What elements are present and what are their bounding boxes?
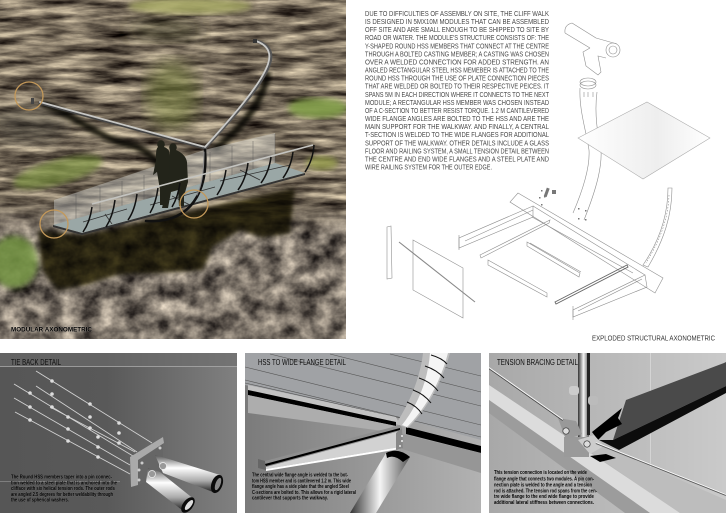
text block: structure description: THROUGH A BOLTED CASTING MEMBER; A CASTING WAS CHOSEN (365, 51, 549, 58)
steel angle sections (480, 220, 628, 304)
photo caption: MODULAR AXONOMETRIC (11, 326, 92, 334)
detail note: rod is attached. The tension rod spans from the cen- (494, 488, 597, 494)
railing tension rod (399, 242, 475, 302)
tension rods (489, 368, 726, 495)
bridge cast shadow (38, 72, 295, 290)
text block: structure description: SPANS 5M IN EACH DIRECTION WHERE IT CONNECTS TO THE NEXT (365, 92, 550, 99)
bolted connection (539, 188, 586, 220)
text block: structure description: Y-SHAPED ROUND HSS MEMBERS THAT CONNECT AT THE CENTRE (365, 43, 549, 50)
text block: structure description: ROUND HSS THROUGH THE USE OF PLATE CONNECTION PIECES (365, 76, 549, 83)
panel background (0, 353, 237, 513)
wide flange diagonal bands (489, 385, 726, 513)
text block: structure description: ROAD OR WATER. THE MODULE'S STRUCTURE CONSISTS OF: THE (365, 35, 549, 42)
glass railing panel (413, 240, 463, 318)
text block: structure description: ANGLED RECTANGULAR STEEL HSS MEMEBER IS ATTACHED TO THE (365, 68, 549, 75)
panel background (489, 353, 726, 513)
panel background (245, 385, 481, 513)
lower round HSS (350, 451, 410, 513)
text block: structure description: THAT ARE WELDED OR BOLTED TO THEIR RESPECTIVE PEICES. IT (365, 84, 550, 91)
detail note: the use of spherical washers. (11, 498, 69, 504)
cantilever wide flange angle (258, 425, 403, 471)
detail note: The central wide flange angle is welded to the bot- (252, 473, 348, 479)
detail note: flange angle has a side plate that the angled Steel (252, 484, 349, 490)
upper walkway surface (245, 353, 481, 440)
text block: structure description: OF A C-SECTION TO BETTER RESIST TORQUE. 1.2 M CANTILEVERED (365, 108, 549, 115)
glass walkway deck (53, 163, 305, 235)
detail note: tom HSS member and is cantilevered 1.2 m. This wide (252, 478, 351, 484)
vertical post (569, 353, 590, 437)
text block: structure description: IS DESIGNED IN 5MX10M MODULES THAT CAN BE ASSEMBLED (365, 19, 549, 26)
text block: structure description: SUPPORT OF THE WALKWAY. OTHER DETAILS INCLUDE A GLASS (365, 140, 549, 147)
text block: structure description: OFF SITE AND ARE SMALL ENOUGH TO BE SHIPPED TO SITE BY (365, 27, 549, 34)
detail note: tre wide flange to the end wide flange to provide (494, 494, 594, 500)
text block: structure description: THE CENTRE AND END WIDE FLANGES AND A STEEL PLATE AND (365, 156, 549, 163)
main HSS beam and cantilevers (459, 193, 663, 320)
panel header (0, 353, 237, 367)
tie-back and Y-shaped round HSS members (31, 39, 271, 221)
text block: structure description (365, 11, 550, 172)
casting member (565, 23, 620, 97)
round HSS column (573, 88, 601, 220)
panel header: TIE BACK DETAIL (11, 357, 61, 367)
text block: structure description: MODULE; A RECTANGULAR HSS MEMBER WAS CHOSEN INSTEAD (365, 100, 549, 107)
railing post (387, 226, 392, 279)
detail note: are angled 2.5 degrees for better weldability through (11, 492, 113, 498)
lower blocky rock face (0, 200, 346, 339)
dark rectangular HSS (592, 362, 726, 450)
detail note: clifface with six helical tension rods. The outer rods (11, 486, 115, 492)
detail note: The Round HSS members taper into a pin connec- (11, 475, 112, 481)
panel: tension bracing detail (489, 353, 726, 513)
detail note: additional lateral stiffness between connections. (494, 500, 594, 506)
cliff rock background (0, 0, 346, 234)
detail note: tion welded to a steel plate that is anchored into the (11, 480, 117, 486)
text block: structure description: OVER A WELDED CONNECTION FOR ADDED STRENGTH. AN (365, 60, 549, 66)
orange detail circles (15, 82, 208, 238)
detail note: This tension connection is located on the wide (494, 470, 587, 476)
outer rail and steel ribs (83, 145, 314, 232)
detail note: C-sections are bolted to. This allows for a rigid lateral (252, 490, 356, 496)
exploded structural axonometric drawing (387, 23, 710, 320)
people silhouettes (153, 140, 188, 208)
text block: structure description: MAIN SUPPORT FOR THE WALKWAY. AND FINALLY, A CENTRAL (365, 124, 549, 131)
pin connection plate (558, 418, 616, 462)
curved end rib (643, 188, 672, 267)
tension rods (14, 371, 152, 474)
text block: structure description: FLOOR AND RAILING SYSTEM, A SMALL TENSION DETAIL BETWEEN (365, 148, 549, 155)
detail note (494, 470, 597, 506)
curved HSS with ribs (396, 353, 450, 428)
detail note (11, 475, 117, 504)
panel: modular axonometric photo (0, 0, 348, 339)
glass railing (54, 133, 275, 232)
panel title: HSS TO WIDE FLANGE DETAIL (258, 357, 346, 367)
panel title: TENSION BRACING DETAIL (497, 357, 578, 367)
detail note (252, 473, 356, 502)
text block: structure description: DUE TO DIFFICULTIES OF ASSEMBLY ON SITE, THE CLIFF WALK (365, 11, 549, 18)
vegetation and tonal patches (0, 0, 348, 288)
detail note: nection plate is welded to the angle and a tension (494, 482, 592, 488)
tapered round HSS members (146, 455, 225, 513)
wide flange beam bands (248, 385, 481, 473)
text block: structure description: WIDE FLANGE ANGLES ARE BOLTED TO THE HSS AND ARE THE (365, 116, 549, 123)
glass floor plate (578, 102, 710, 179)
text block: structure description: WIRE RAILING SYSTEM FOR THE OUTER EDGE. (365, 164, 492, 172)
detail note: cantilever that supports the walkway. (252, 496, 328, 502)
text block: structure description: T-SECTION IS WELDED TO THE WIDE FLANGES FOR ADDITIONAL (365, 132, 549, 139)
panel: tie back detail (0, 353, 237, 513)
anchor plate (130, 437, 164, 487)
detail note: flange angle that connects two modules. A pin con- (494, 476, 594, 482)
panel: HSS to wide flange detail (245, 353, 481, 513)
